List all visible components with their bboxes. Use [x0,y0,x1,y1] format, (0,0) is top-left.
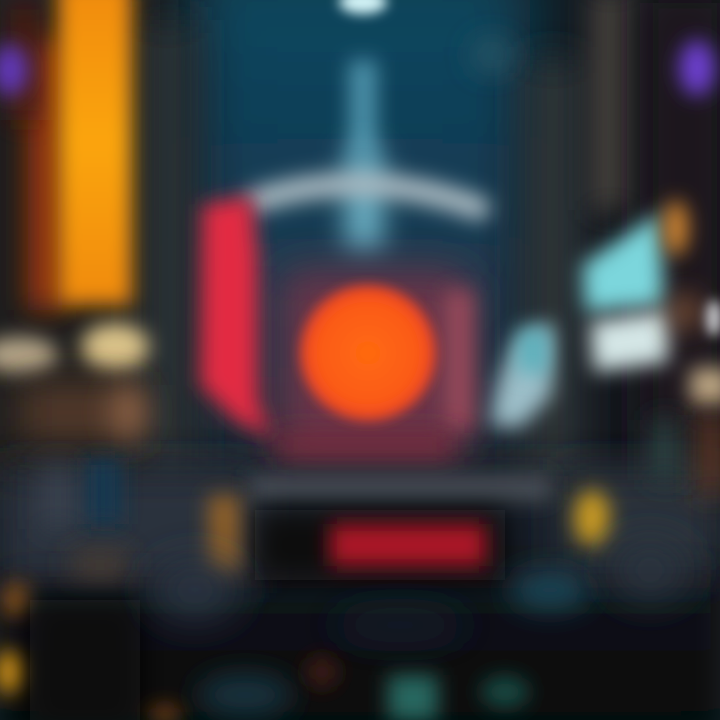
purple lights [0,40,715,96]
lower street crowd [149,540,690,720]
right side storefront [652,368,720,495]
left side lights and storefronts [0,323,149,720]
right cyan and white signs [582,200,720,372]
red vertical shape [200,195,272,438]
top light and vertical beam [339,0,512,250]
pale arc [258,184,478,208]
small pale sign [490,322,552,428]
left orange sign [10,0,132,310]
dark display with red text block [255,510,505,580]
red-pink panel behind the circle [275,270,473,458]
orange circle [300,285,436,421]
amber lights beside the display [208,490,610,573]
grey band under the panel [250,476,550,500]
